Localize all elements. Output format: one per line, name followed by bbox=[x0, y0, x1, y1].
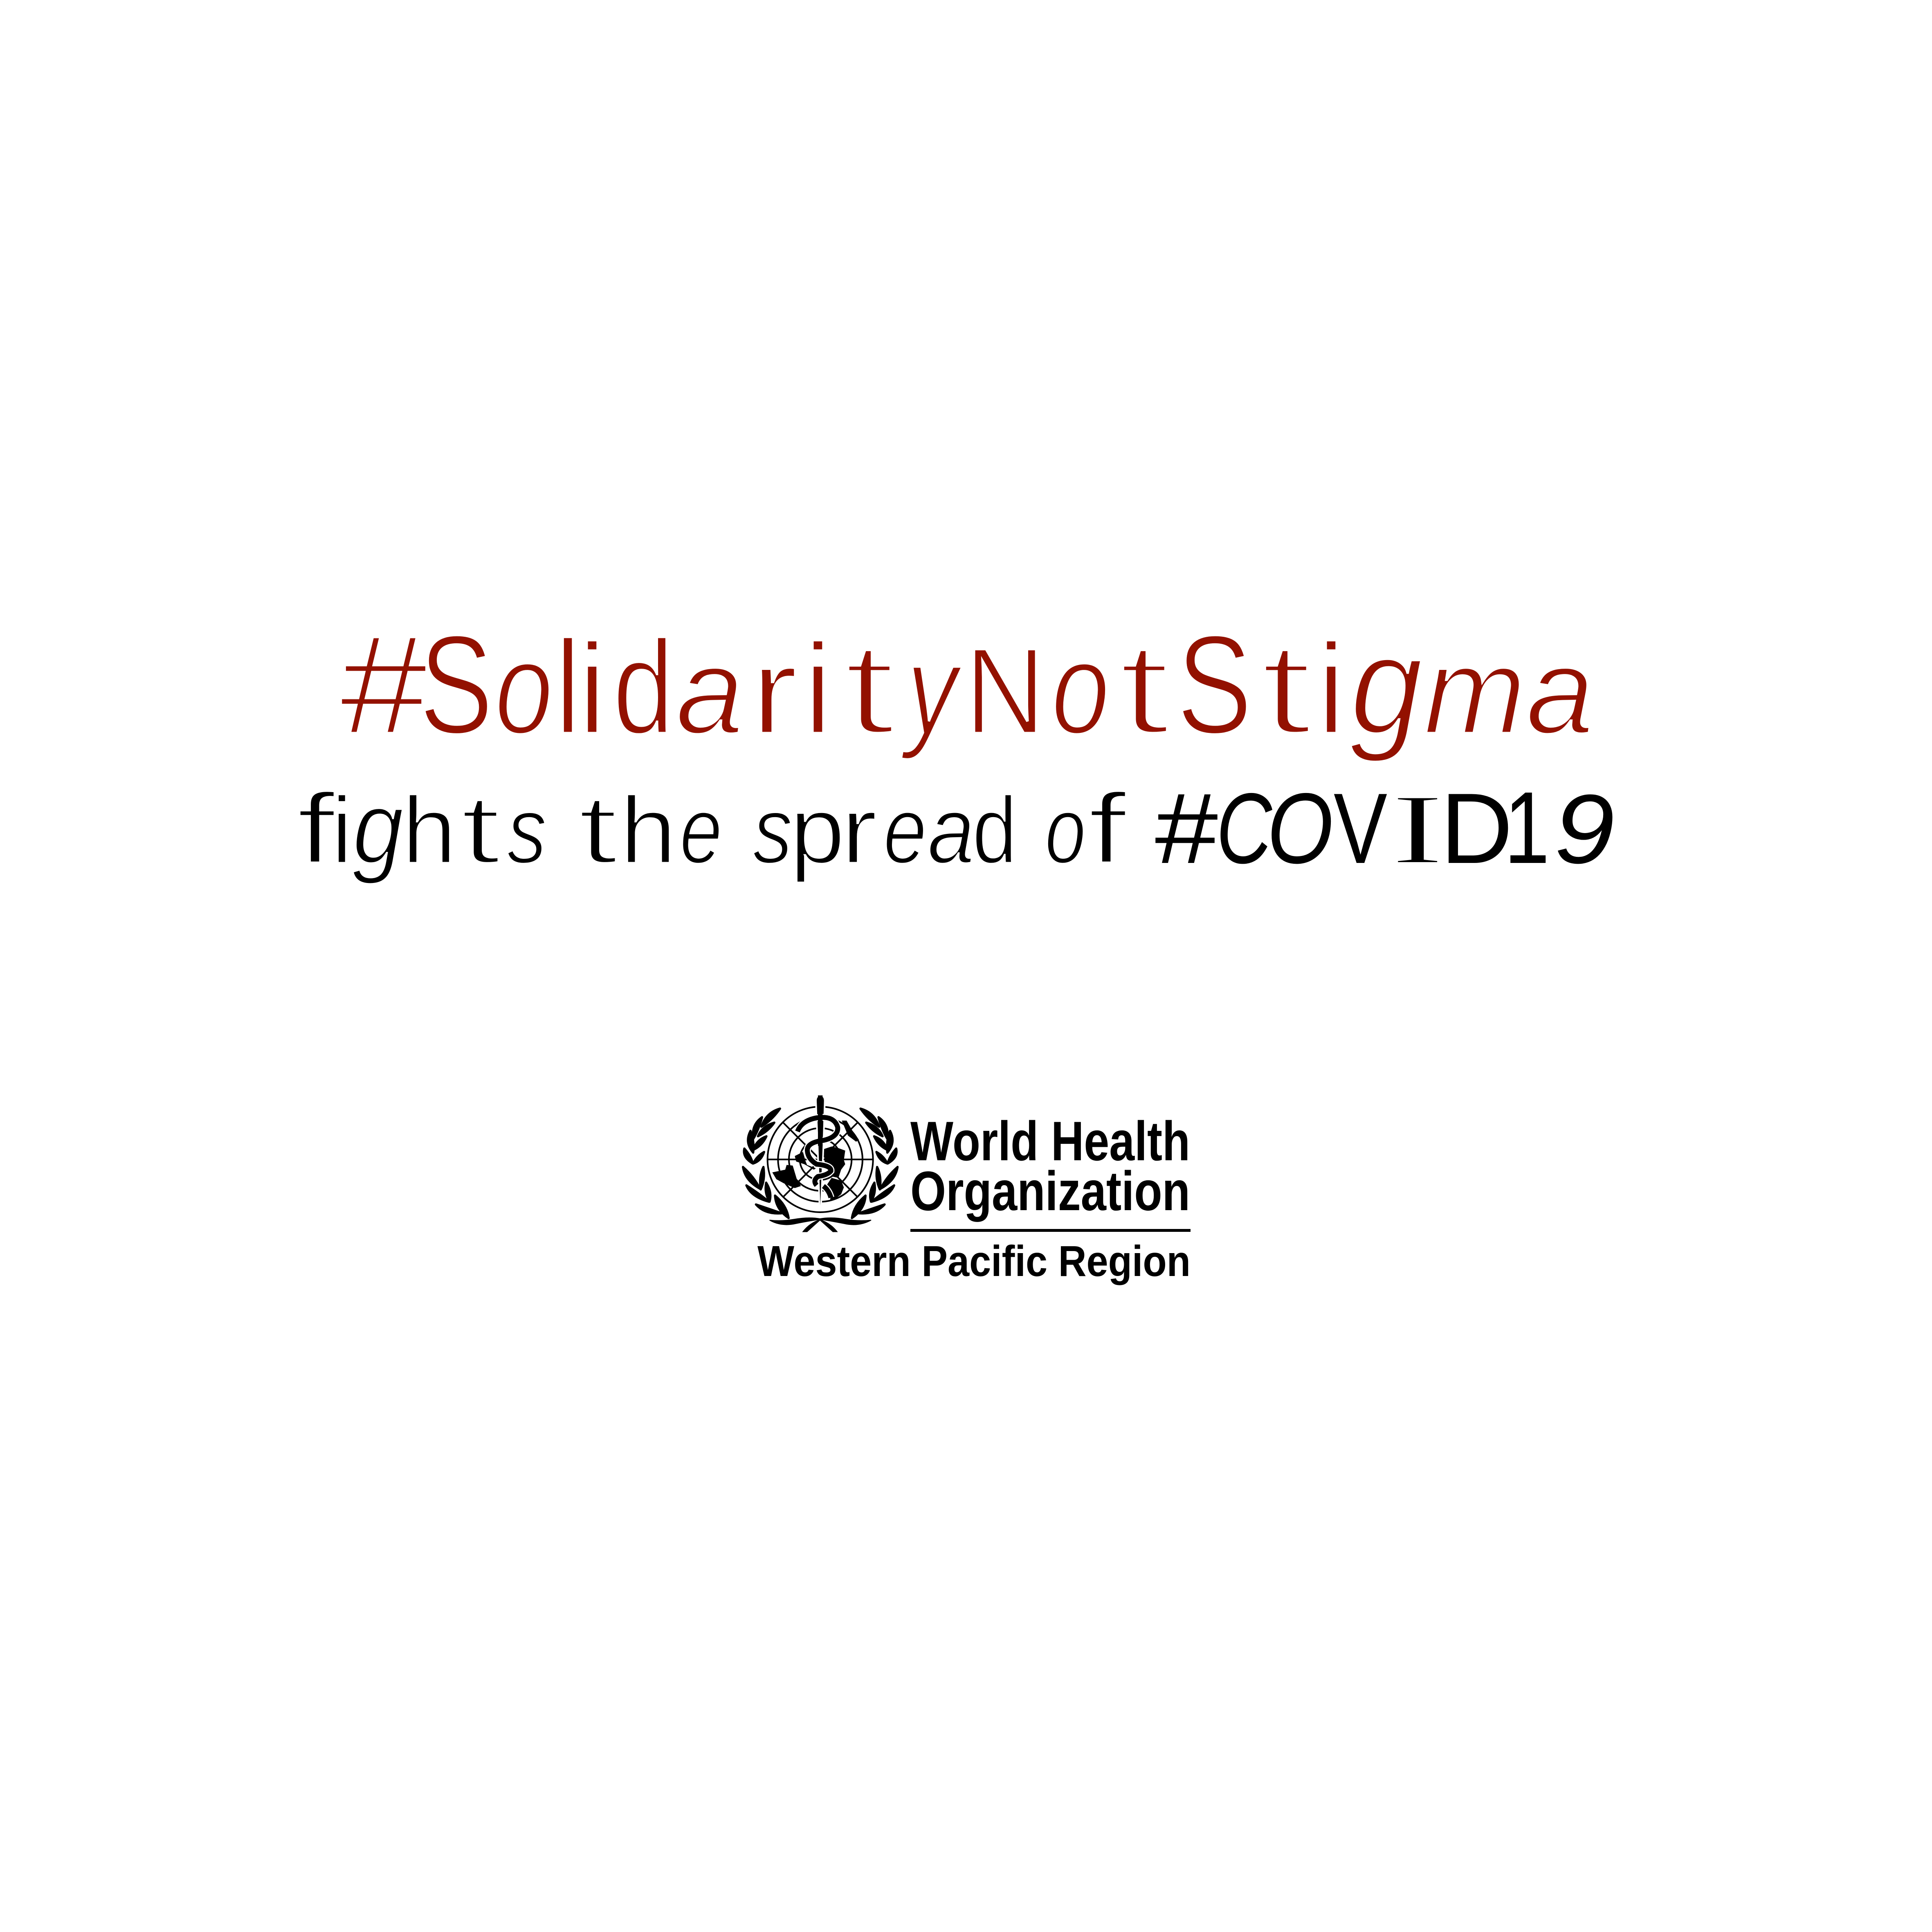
title: #SolidarityNotStigma: i bbox=[804, 617, 832, 761]
subtitle: fights the spread of #COVID19: o bbox=[1045, 777, 1086, 883]
emblem snake bbox=[798, 1095, 838, 1209]
title: #SolidarityNotStigma: a bbox=[676, 622, 744, 759]
title: #SolidarityNotStigma: i bbox=[578, 617, 607, 761]
logo text: Western Pacific Region: Western Pacific Region bbox=[757, 1237, 1191, 1285]
subtitle: fights the spread of #COVID19: e bbox=[680, 777, 722, 883]
title: #SolidarityNotStigma: t bbox=[843, 615, 897, 761]
title: #SolidarityNotStigma: t bbox=[1260, 615, 1314, 761]
title: #SolidarityNotStigma: i bbox=[1317, 617, 1346, 761]
logo: World Health Organization Western Pacific Region bbox=[743, 1095, 1191, 1285]
subtitle: fights the spread of #COVID19: t bbox=[577, 774, 618, 884]
title: #SolidarityNotStigma: S bbox=[1177, 606, 1252, 764]
title: #SolidarityNotStigma: m bbox=[1424, 622, 1526, 759]
subtitle: fights the spread of #COVID19: f bbox=[297, 772, 336, 884]
title: #SolidarityNotStigma: g bbox=[1350, 608, 1424, 764]
emblem laurel left bbox=[743, 1109, 789, 1218]
title: #SolidarityNotStigma: t bbox=[1118, 615, 1172, 761]
emblem continents bbox=[772, 1121, 859, 1200]
subtitle: fights the spread of #COVID19: h bbox=[620, 777, 676, 883]
subtitle: fights the spread of #COVID19: O bbox=[1267, 772, 1333, 884]
emblem globe grid bbox=[768, 1107, 873, 1212]
title: #SolidarityNotStigma: d bbox=[613, 613, 674, 762]
subtitle: fights the spread of #COVID19: # bbox=[1153, 772, 1218, 884]
title: #SolidarityNotStigma: a bbox=[1526, 622, 1594, 759]
subtitle: fights the spread of #COVID19: s bbox=[507, 777, 547, 883]
subtitle: fights the spread of #COVID19: f bbox=[1088, 772, 1127, 884]
subtitle: fights the spread of #COVID19: t bbox=[460, 774, 501, 884]
subtitle: fights the spread of #COVID19: 1 bbox=[1504, 771, 1550, 885]
subtitle: fights the spread of #COVID19: i bbox=[331, 777, 353, 883]
logo rule bbox=[910, 1229, 1191, 1232]
subtitle: fights the spread of #COVID19: h bbox=[402, 777, 456, 883]
subtitle: fights the spread of #COVID19: V bbox=[1334, 772, 1387, 884]
icon: WHO emblem bbox=[743, 1095, 898, 1232]
title: #SolidarityNotStigma: S bbox=[419, 606, 493, 764]
subtitle: fights the spread of #COVID19: e bbox=[883, 777, 927, 883]
subtitle: fights the spread of #COVID19: s bbox=[753, 777, 793, 883]
title: #SolidarityNotStigma: y bbox=[901, 618, 964, 761]
emblem staff bbox=[816, 1095, 825, 1209]
subtitle: fights the spread of #COVID19: D bbox=[1440, 772, 1513, 884]
title: #SolidarityNotStigma: r bbox=[751, 622, 798, 759]
title: #SolidarityNotStigma: # bbox=[337, 606, 429, 764]
subtitle: fights the spread of #COVID19: 9 bbox=[1554, 774, 1615, 884]
subtitle: fights the spread of #COVID19: r bbox=[841, 777, 877, 883]
title: #SolidarityNotStigma: l bbox=[555, 613, 581, 762]
title: #SolidarityNotStigma: N bbox=[965, 622, 1045, 759]
emblem laurel right bbox=[852, 1109, 898, 1218]
title: #SolidarityNotStigma: o bbox=[495, 615, 553, 761]
subtitle: fights the spread of #COVID19: a bbox=[928, 777, 975, 883]
subtitle: fights the spread of #COVID19: I bbox=[1391, 774, 1444, 885]
subtitle: fights the spread of #COVID19: p bbox=[790, 777, 845, 883]
subtitle: fights the spread of #COVID19: g bbox=[353, 771, 404, 885]
logo text: Organization: Organization bbox=[910, 1160, 1190, 1222]
emblem ribbon bbox=[770, 1218, 871, 1232]
subtitle: fights the spread of #COVID19: C bbox=[1216, 772, 1273, 884]
title: #SolidarityNotStigma: o bbox=[1051, 615, 1110, 761]
logo text: World Health: World Health bbox=[910, 1110, 1190, 1172]
subtitle: fights the spread of #COVID19: d bbox=[972, 777, 1017, 883]
